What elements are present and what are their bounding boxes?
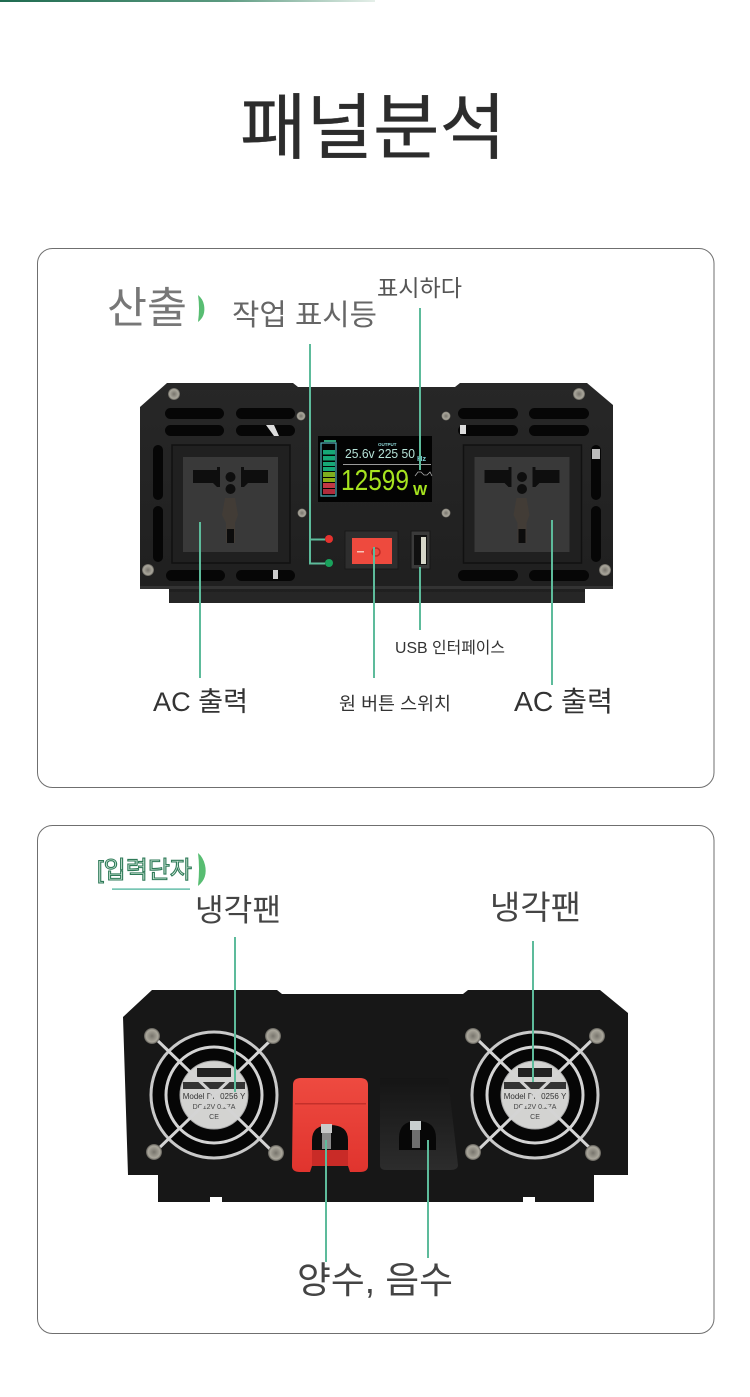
heading: output: 산출 <box>107 285 187 333</box>
display: W <box>413 482 428 499</box>
top accent strip <box>0 0 375 2</box>
red terminal <box>292 1078 368 1172</box>
label: USB interface: USB 인터페이스 <box>395 639 505 657</box>
title: 패널분석 <box>240 89 506 169</box>
heading underline <box>112 888 190 890</box>
left socket <box>172 445 290 563</box>
label: AC output right: AC 출력 <box>514 686 613 717</box>
display: OUTPUT <box>378 442 397 447</box>
panel: output <box>38 248 714 788</box>
label: positive and negative: 양수, 음수 <box>297 1260 453 1301</box>
label: power button switch: 원 버튼 스위치 <box>339 693 451 714</box>
LEDs <box>325 535 333 567</box>
label: work indicator: 작업 표시등 <box>232 299 377 332</box>
label: display: 표시하다 <box>377 275 462 301</box>
heading accent <box>198 295 204 322</box>
label: cooling fan right: 냉각팬 <box>490 889 581 926</box>
leader lines: input <box>235 937 533 1262</box>
panel: input <box>38 826 714 1334</box>
left fan <box>151 1032 277 1158</box>
label: cooling fan left: 냉각팬 <box>195 893 281 928</box>
vents <box>153 408 601 581</box>
black terminal <box>380 1078 458 1170</box>
display: 25.6v 225 50 <box>345 446 415 461</box>
inverter front <box>140 383 613 603</box>
heading accent <box>198 853 206 886</box>
power switch <box>345 531 398 569</box>
inverter rear <box>123 990 628 1202</box>
screws <box>142 388 611 576</box>
display <box>318 436 432 502</box>
display: Hz <box>417 454 426 463</box>
label: AC output left: AC 출력 <box>153 687 248 717</box>
right fan <box>472 1032 598 1158</box>
leader lines: output <box>200 308 552 685</box>
display: 12599 <box>341 465 409 497</box>
USB port <box>411 531 430 569</box>
right socket <box>464 445 582 563</box>
heading: input terminal: [입력단자 <box>97 857 192 884</box>
